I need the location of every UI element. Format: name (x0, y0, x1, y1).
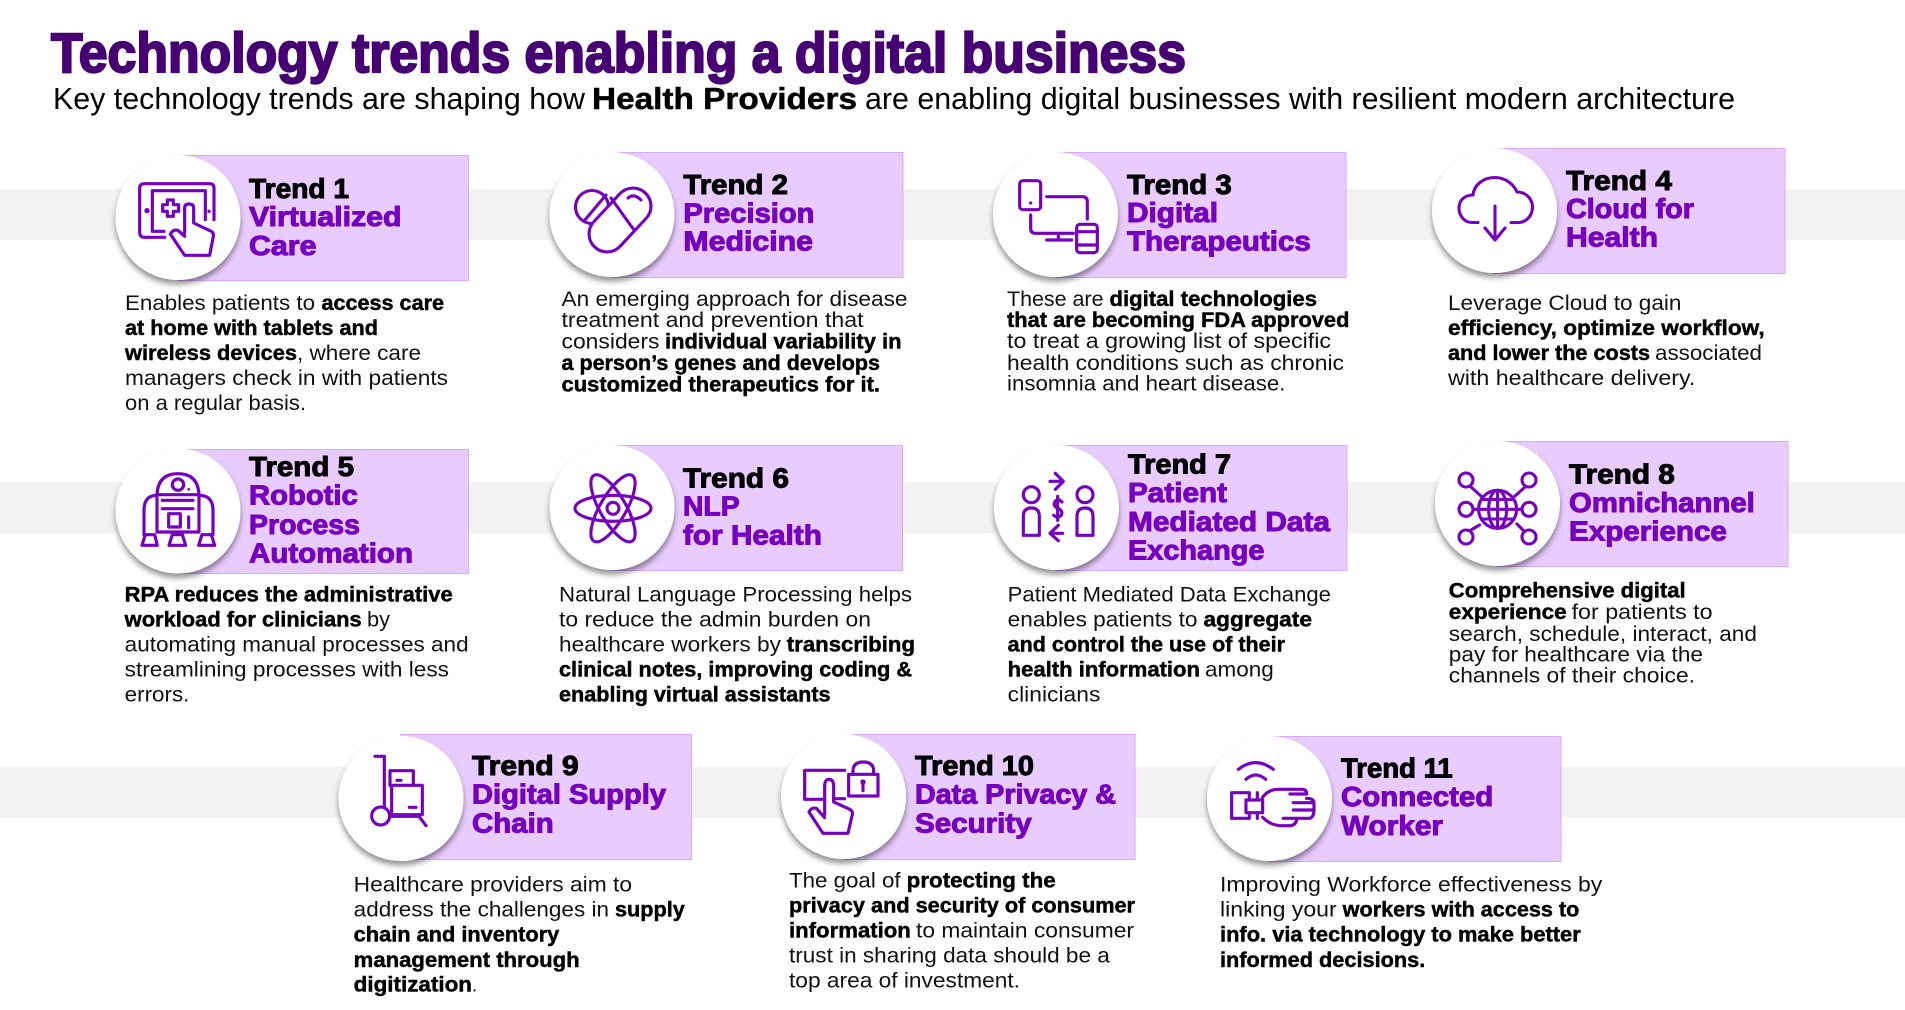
body text: workload for clinicians (124, 609, 362, 632)
body text: associated (1655, 342, 1762, 365)
body text (124, 584, 469, 707)
icon: connected wristband (1232, 763, 1314, 826)
body text: . (472, 974, 477, 997)
icon circle (1432, 148, 1557, 273)
heading: Omnichannel (1569, 487, 1755, 518)
body text (354, 874, 685, 997)
body text: top area of investment. (789, 970, 1020, 993)
icon: touch and lock (805, 762, 878, 833)
body text: chain and inventory (354, 924, 560, 947)
body text: clinicians (1008, 684, 1100, 707)
subtitle (53, 81, 1735, 116)
body text: that are becoming FDA approved (1007, 309, 1349, 332)
body text: Healthcare providers aim to (354, 874, 632, 897)
heading: Trend 7 (1128, 448, 1231, 479)
heading: Data Privacy & (915, 778, 1116, 809)
body text: protecting the (907, 870, 1056, 893)
body text: information (789, 920, 911, 943)
icon circle (550, 445, 674, 570)
heading: for Health (683, 520, 822, 551)
header box (612, 446, 902, 570)
body text: , where care (297, 342, 421, 365)
icon circle (994, 445, 1119, 570)
icon circle (1207, 736, 1332, 861)
heading: Experience (1569, 516, 1727, 547)
body text: and control the use of their (1008, 634, 1285, 657)
body text: enables patients to (1008, 609, 1198, 632)
body text: transcribing (787, 634, 915, 657)
body text: linking your (1220, 899, 1337, 922)
body text: to reduce the admin burden on (559, 609, 871, 632)
heading: Connected (1341, 781, 1493, 812)
body text: efficiency, optimize workflow, (1448, 317, 1765, 340)
body text: to maintain consumer (916, 920, 1134, 943)
heading (472, 750, 667, 839)
body text: management through (354, 949, 580, 972)
body text: on a regular basis. (125, 392, 306, 415)
subtitle: Key technology trends are shaping how (53, 81, 586, 116)
icon: supply trolley (372, 756, 426, 826)
heading: Process (249, 509, 360, 540)
panel: Trend 10 (781, 734, 1135, 993)
heading: Trend 11 (1341, 753, 1453, 784)
heading: Trend 9 (472, 750, 579, 781)
header box (1056, 446, 1347, 570)
heading: Exchange (1128, 534, 1264, 565)
body text: workers with access to (1342, 899, 1579, 922)
heading (1128, 448, 1331, 565)
icon circle (993, 152, 1118, 277)
heading (1341, 753, 1493, 841)
body text (562, 288, 908, 397)
body text: supply (615, 899, 685, 922)
header box (612, 152, 903, 278)
body text (124, 292, 448, 415)
body text (789, 870, 1135, 993)
icon circle (1435, 441, 1560, 566)
body text: These are (1007, 288, 1104, 311)
body text: trust in sharing data should be a (789, 945, 1110, 968)
icon: devices (1020, 181, 1097, 253)
icon: patient data exchange (1023, 473, 1093, 541)
body text: clinical notes, improving coding & (559, 659, 912, 682)
body text (1008, 584, 1331, 707)
icon circle (338, 736, 464, 861)
body text: by (367, 609, 391, 632)
icon circle (116, 155, 240, 280)
title: Technology trends enabling a digital business (51, 21, 1186, 84)
heading: Trend 2 (683, 169, 788, 200)
body text: automating manual processes and (125, 634, 469, 657)
body text (1447, 292, 1765, 390)
body text: The goal of (789, 870, 901, 893)
heading: Trend 6 (683, 462, 789, 493)
heading: Trend 1 (249, 173, 349, 204)
body text: digitization (354, 974, 472, 997)
heading: Precision (683, 197, 814, 228)
header box (401, 734, 692, 860)
header box (178, 156, 468, 280)
body text: Natural Language Processing helps (559, 584, 912, 607)
body text: pay for healthcare via the (1449, 644, 1703, 667)
body text: healthcare workers by (559, 634, 782, 657)
heading: Care (249, 230, 316, 261)
icon: atom (575, 469, 651, 548)
body text: individual variability in (665, 330, 902, 354)
heading (683, 462, 822, 551)
panel: Trend 3 (993, 152, 1349, 396)
heading: Health (1566, 222, 1658, 253)
heading: Trend 10 (915, 750, 1034, 781)
body text: Leverage Cloud to gain (1448, 292, 1682, 315)
panel: Trend 11 (1207, 736, 1603, 972)
heading (249, 173, 402, 261)
header box (1270, 736, 1561, 862)
heading: Trend 4 (1566, 165, 1673, 196)
body text: insomnia and heart disease. (1007, 373, 1286, 396)
heading: Trend 5 (249, 451, 354, 482)
panel: Trend 1 (116, 155, 468, 415)
heading: Mediated Data (1128, 506, 1331, 537)
body text: health conditions such as chronic (1007, 352, 1344, 375)
panel: Trend 2 (550, 152, 908, 397)
body text (559, 584, 915, 707)
body text: among (1205, 659, 1274, 682)
body text: Improving Workforce effectiveness by (1220, 874, 1603, 897)
body text: health information (1008, 659, 1200, 682)
panel: Trend 7 (994, 445, 1347, 707)
body text: at home with tablets and (125, 317, 378, 340)
icon circle (116, 448, 240, 574)
heading: Automation (249, 538, 413, 569)
body text (1007, 288, 1349, 396)
body text: address the challenges in (354, 899, 609, 922)
body text: aggregate (1204, 609, 1312, 632)
panel: Trend 8 (1435, 441, 1788, 688)
header box (178, 450, 468, 574)
heading (1569, 458, 1755, 547)
heading (915, 750, 1116, 839)
heading (683, 169, 814, 257)
heading: Digital Supply (472, 778, 667, 809)
heading (249, 451, 413, 569)
body text: customized therapeutics for it. (562, 374, 880, 397)
body text: for patients to (1572, 601, 1713, 624)
heading: Medicine (683, 226, 813, 257)
heading: Virtualized (249, 201, 402, 232)
body text: RPA reduces the administrative (125, 584, 453, 607)
icon: omnichannel globe (1459, 473, 1536, 544)
subtitle: are enabling digital businesses with resilient modern architecture (865, 81, 1735, 116)
body text: enabling virtual assistants (559, 684, 831, 707)
body text: and lower the costs (1448, 342, 1650, 365)
header box (1056, 152, 1346, 278)
heading: Patient (1128, 477, 1227, 508)
body text: to treat a growing list of specific (1007, 330, 1331, 353)
body text: errors. (125, 684, 189, 707)
heading: Chain (472, 808, 554, 839)
body text (1449, 580, 1757, 688)
icon: pills (576, 181, 658, 259)
heading: Cloud for (1566, 193, 1694, 224)
heading: Worker (1341, 810, 1443, 841)
heading: Digital (1127, 197, 1218, 228)
body text: search, schedule, interact, and (1449, 623, 1757, 646)
header box (1497, 442, 1788, 566)
body text: managers check in with patients (125, 367, 448, 390)
heading (1566, 165, 1694, 253)
heading: Trend 8 (1569, 458, 1675, 489)
body text: privacy and security of consumer (789, 895, 1135, 918)
body text: channels of their choice. (1449, 665, 1695, 688)
panel: Trend 9 (338, 734, 692, 997)
icon: tablet touch (140, 184, 214, 255)
icon circle (550, 152, 674, 277)
body text: info. via technology to make better (1220, 924, 1581, 947)
panel: Trend 5 (116, 448, 469, 707)
body text: Comprehensive digital (1449, 580, 1686, 603)
heading: Therapeutics (1127, 226, 1311, 256)
body text: experience (1449, 601, 1567, 624)
body text: a person’s genes and develops (562, 352, 880, 375)
body text: digital technologies (1110, 288, 1317, 311)
panel: Trend 6 (550, 445, 915, 707)
header box (1494, 148, 1785, 274)
body text: wireless devices (124, 342, 297, 365)
icon: cloud download (1459, 178, 1532, 240)
icon circle (781, 734, 906, 859)
subtitle: Health Providers (592, 81, 857, 116)
body text: Patient Mediated Data Exchange (1008, 584, 1331, 607)
body text: informed decisions. (1220, 949, 1425, 972)
heading (1127, 169, 1311, 256)
heading: Robotic (249, 480, 358, 511)
heading: NLP (683, 491, 740, 522)
body text: treatment and prevention that (562, 309, 864, 332)
heading: Trend 3 (1127, 169, 1232, 200)
icon: robot (142, 474, 215, 545)
panel: Trend 4 (1432, 148, 1785, 390)
body text (1220, 874, 1603, 972)
body text: access care (322, 292, 444, 315)
body text: considers (562, 330, 660, 354)
body text: An emerging approach for disease (562, 288, 908, 311)
heading: Security (915, 808, 1032, 839)
body text: streamlining processes with less (125, 659, 449, 682)
body text: with healthcare delivery. (1447, 367, 1695, 390)
header box (844, 734, 1135, 860)
body text: Enables patients to (125, 292, 315, 315)
